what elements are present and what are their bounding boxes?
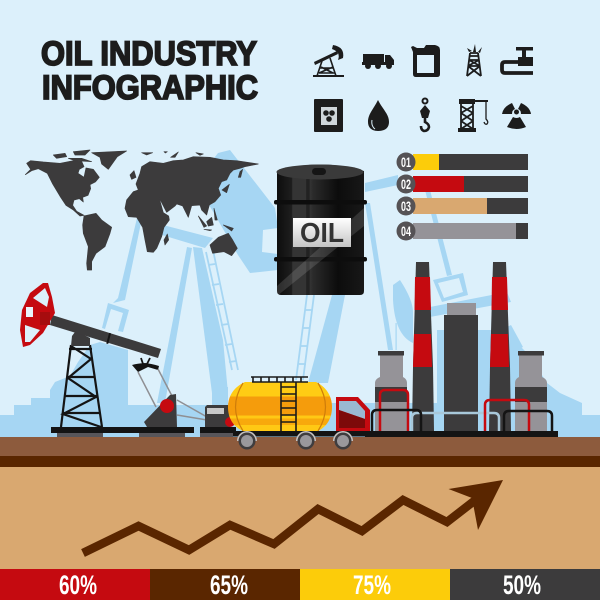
icon row: oil industry pictograms xyxy=(313,44,533,132)
Greenland xyxy=(92,151,127,169)
background: pale blue pumpjacks and skyline silhouette xyxy=(0,150,600,437)
left rods and legs xyxy=(113,218,142,303)
tank ladder xyxy=(251,377,308,431)
barrel cap xyxy=(312,168,326,175)
50% block: 50% xyxy=(503,570,541,600)
wheels xyxy=(237,431,353,450)
bar 02: 02 xyxy=(401,176,411,192)
refinery xyxy=(365,262,558,437)
rear machinery xyxy=(200,405,236,437)
pipes xyxy=(372,390,552,431)
left pumpjack beam xyxy=(162,225,213,248)
icon: tower crane xyxy=(458,99,488,132)
yellow tank xyxy=(228,382,332,431)
left ladder xyxy=(206,250,238,370)
bar 01: 01 xyxy=(401,154,411,170)
Madagascar and British Isles xyxy=(130,171,169,245)
title: INFOGRAPHIC xyxy=(42,69,258,107)
tanker truck xyxy=(200,377,375,450)
75% block xyxy=(300,569,450,600)
icon: crane hook xyxy=(420,98,430,131)
icon: gushing oil derrick xyxy=(467,44,482,76)
progress bars xyxy=(396,152,528,240)
truck cab xyxy=(336,397,370,431)
walking beam xyxy=(50,315,161,358)
barrel rings xyxy=(274,200,367,262)
rising arrow xyxy=(83,480,503,553)
60% block xyxy=(0,569,150,600)
derrick cap xyxy=(71,332,90,346)
horsehead hanger xyxy=(132,358,172,407)
75% block: 75% xyxy=(353,570,391,600)
world map xyxy=(25,150,258,270)
60% block: 60% xyxy=(59,570,97,600)
50% block xyxy=(450,569,600,600)
South America xyxy=(83,213,112,270)
derrick tower xyxy=(61,345,102,427)
right chimney xyxy=(489,262,511,431)
oil barrel xyxy=(274,164,367,296)
title xyxy=(41,35,258,107)
central tower xyxy=(444,303,478,431)
icon: pumpjack xyxy=(313,45,344,77)
pumpjack base xyxy=(51,427,194,437)
left chimney xyxy=(412,262,434,431)
right ladder xyxy=(296,295,314,380)
North and Central America xyxy=(25,161,99,216)
left pumpjack head xyxy=(200,150,278,273)
right silo xyxy=(515,351,547,431)
skyline silhouette xyxy=(0,330,600,437)
left silo xyxy=(375,351,407,431)
Eurasia and Africa xyxy=(125,157,258,252)
icon: oil drop xyxy=(368,100,389,131)
chassis xyxy=(233,431,375,436)
title: OIL INDUSTRY xyxy=(41,35,257,73)
Japan and South-East Asia xyxy=(198,169,243,231)
icon: tanker truck xyxy=(362,54,394,69)
red flywheel xyxy=(20,283,55,347)
bar 03: 03 xyxy=(401,198,411,214)
bar 04: 04 xyxy=(401,223,411,239)
pumpjack linkage box xyxy=(102,303,129,332)
tank ribs xyxy=(236,383,326,431)
Arctic islands xyxy=(53,150,203,162)
ground layers xyxy=(0,437,600,569)
65% block xyxy=(150,569,300,600)
icon: pipeline valve xyxy=(502,47,533,73)
icon: radiation symbol xyxy=(502,103,531,129)
barrel label: OIL xyxy=(300,217,344,248)
refinery base xyxy=(365,431,558,437)
65% block: 65% xyxy=(210,570,248,600)
pumpjack xyxy=(20,283,207,437)
right pumpjack xyxy=(365,175,398,192)
icon: jerry can xyxy=(411,45,440,77)
Australia xyxy=(210,233,237,256)
icon: radioactive drum xyxy=(314,99,343,132)
percent strip xyxy=(0,569,600,600)
counterweight crank xyxy=(144,394,207,427)
